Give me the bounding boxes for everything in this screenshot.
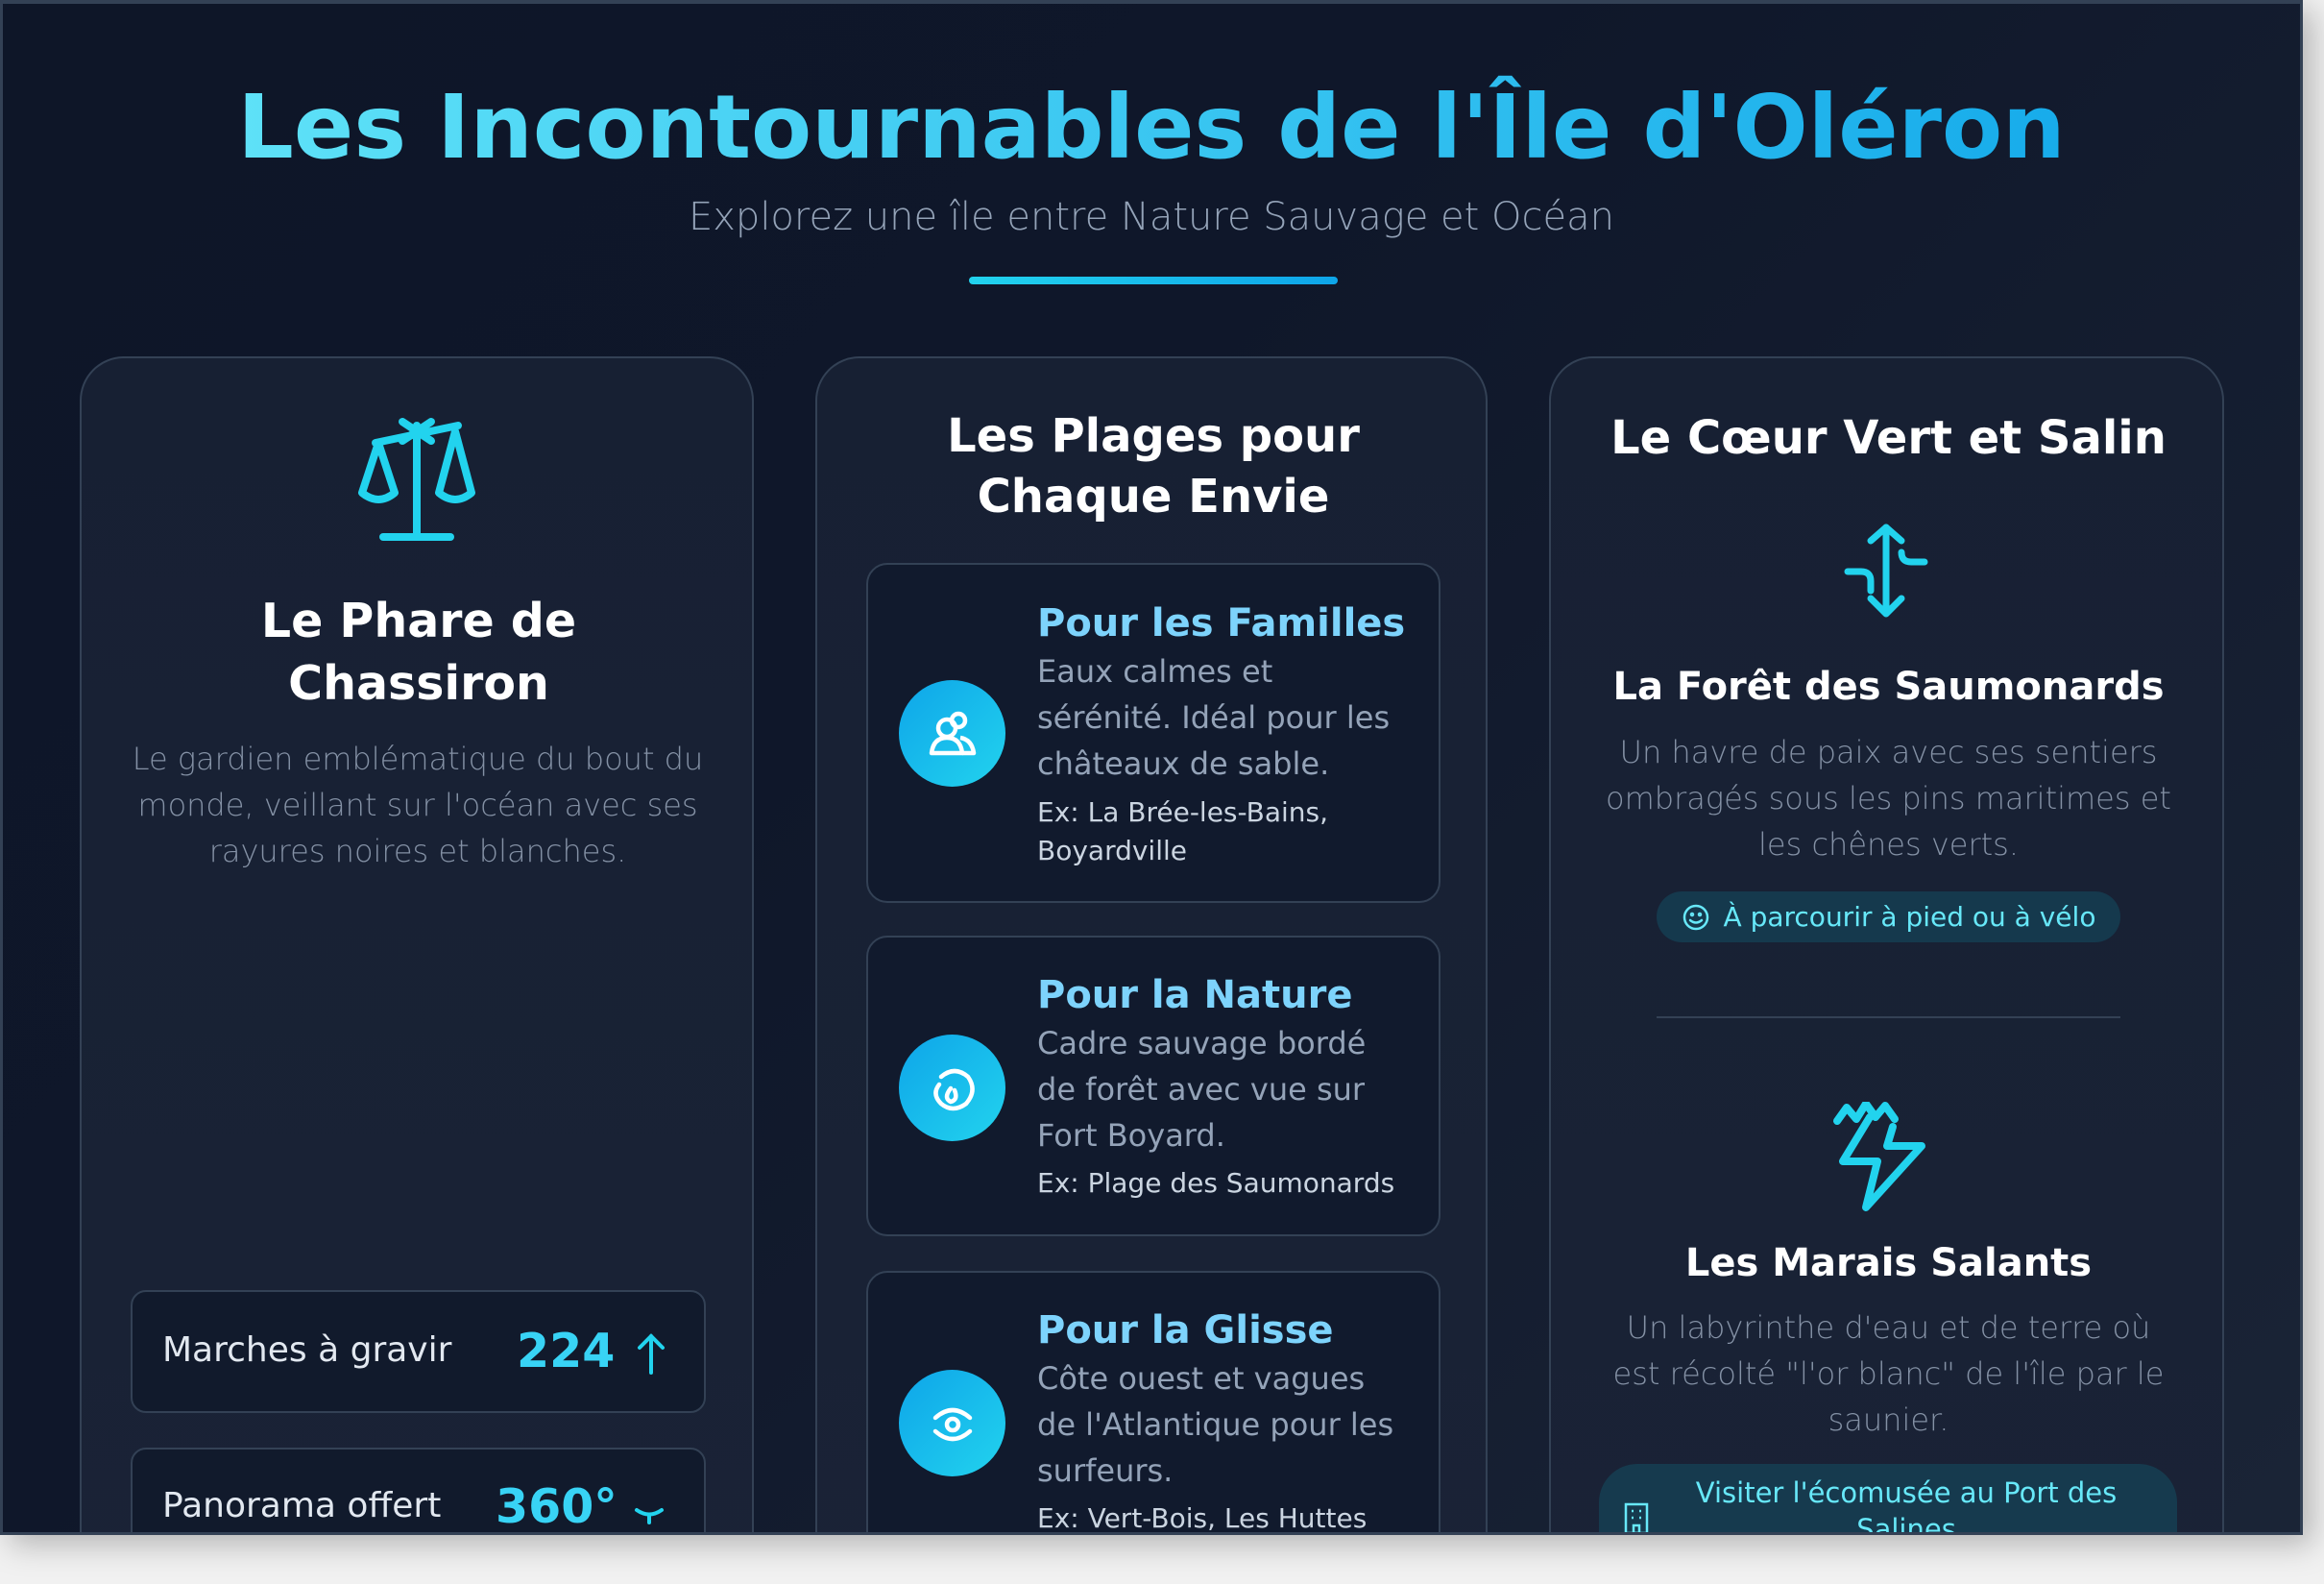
pill: pied velo: À parcourir à pied ou à vélo — [1724, 901, 2095, 933]
card: familles: Pour les Familles — [1037, 601, 1405, 646]
stat: panorama — [131, 1448, 706, 1584]
heading: marais: Les Marais Salants — [1685, 1241, 2092, 1285]
card: glisse: Côte ouest et vagues de l'Atlantique pour les surfeurs. — [1037, 1360, 1393, 1489]
subtitle: Explorez une île entre Nature Sauvage et Océan — [689, 195, 1614, 239]
text: marais description: Un labyrinthe d'eau et de terre où est récolté "l'or blanc" de l'île par le saunier. — [1613, 1309, 2164, 1438]
card: nature: Ex: Plage des Saumonards — [1037, 1167, 1394, 1199]
text: foret description: Un havre de paix avec ses sentiers ombragés sous les pins maritimes et les chênes verts. — [1606, 734, 2171, 863]
icon: surf — [899, 1370, 1005, 1476]
card: familles: Ex: La Brée-les-Bains, Boyardville — [1037, 796, 1328, 866]
icon: family — [899, 680, 1005, 787]
stat: marches: 224 — [517, 1324, 615, 1378]
card: familles: Eaux calmes et sérénité. Idéal pour les châteaux de sable. — [1037, 653, 1390, 782]
heading: foret: La Forêt des Saumonards — [1612, 665, 2165, 709]
heading: phare: Le Phare de — [261, 594, 576, 648]
button: ecomusee — [1599, 1464, 2177, 1541]
icon: forest arrows — [1844, 524, 1928, 617]
card: glisse: Pour la Glisse — [1037, 1308, 1334, 1352]
heading: plages: Chaque Envie — [978, 470, 1329, 524]
panel: plages — [815, 356, 1488, 1584]
card: glisse — [866, 1271, 1440, 1584]
icon: nature — [899, 1035, 1005, 1141]
stat: panorama: Panorama offert — [162, 1486, 441, 1525]
stat: marches: Marches à gravir — [162, 1330, 451, 1370]
panel: coeur vert — [1549, 356, 2224, 1584]
title: Les Incontournables de l'Île d'Oléron — [237, 76, 2066, 179]
icon: salt marsh — [1833, 1102, 1925, 1211]
accent bar — [969, 277, 1338, 284]
stat: marches — [131, 1290, 706, 1413]
heading: plages — [947, 409, 1360, 524]
text: phare description: Le gardien emblématique du bout du monde, veillant sur l'océan avec ses rayures noires et blanches. — [133, 741, 703, 869]
card: nature: Pour la Nature — [1037, 973, 1352, 1017]
heading: phare: Chassiron — [288, 656, 549, 711]
card: familles — [866, 563, 1440, 903]
stat: panorama: 360° — [496, 1479, 617, 1534]
pill: pied velo — [1657, 891, 2120, 942]
card: nature — [866, 936, 1440, 1236]
title — [3, 65, 2300, 190]
panel: phare — [80, 356, 754, 1584]
icon: scales — [358, 418, 475, 541]
heading: plages: Les Plages pour — [947, 409, 1360, 463]
heading: phare — [261, 594, 576, 711]
heading: coeur vert: Le Cœur Vert et Salin — [1610, 411, 2167, 465]
card: glisse: Ex: Vert-Bois, Les Huttes — [1037, 1502, 1367, 1534]
card: nature: Cadre sauvage bordé de forêt avec vue sur Fort Boyard. — [1037, 1025, 1366, 1154]
